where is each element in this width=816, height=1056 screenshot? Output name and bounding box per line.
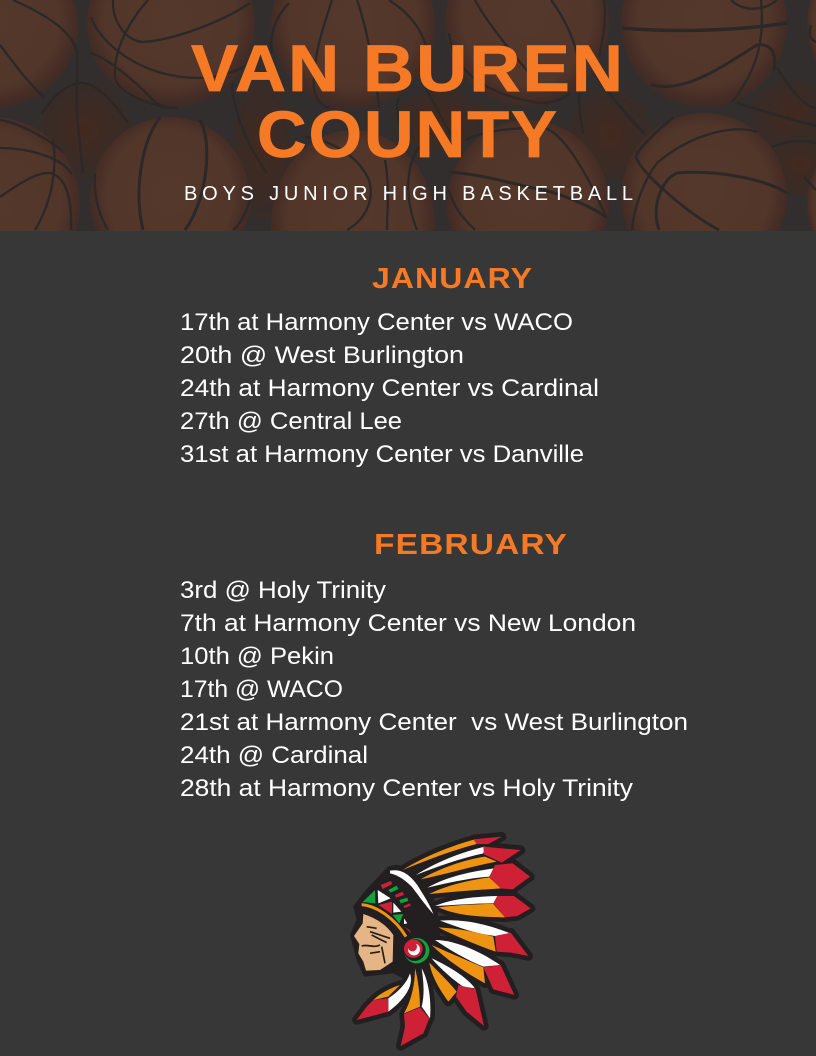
heading: January: JANUARY	[372, 263, 533, 295]
logo: chief with feather headdress	[352, 837, 531, 1046]
title: COUNTY	[257, 97, 559, 171]
heading: February: FEBRUARY	[374, 529, 568, 561]
header: basketball photo band	[0, 0, 816, 231]
title: VAN BUREN	[191, 31, 625, 105]
title	[191, 31, 625, 171]
January games	[180, 309, 599, 468]
February games: 3rd @ Holy Trinity	[180, 577, 386, 604]
February games: 21st at Harmony Center vs West Burlington	[180, 709, 688, 736]
feather outlines	[357, 837, 531, 1046]
February games: 17th @ WACO	[180, 676, 343, 703]
January games: 24th at Harmony Center vs Cardinal	[180, 375, 599, 402]
white plume	[390, 870, 433, 914]
February games: 24th @ Cardinal	[180, 742, 368, 769]
subtitle: BOYS JUNIOR HIGH BASKETBALL	[184, 183, 633, 205]
January games: 17th at Harmony Center vs WACO	[180, 309, 573, 336]
feathers	[357, 837, 531, 1046]
February games	[180, 577, 688, 802]
head silhouette	[352, 867, 439, 980]
January games: 31st at Harmony Center vs Danville	[180, 441, 584, 468]
headband beadwork	[363, 881, 411, 933]
January games: 27th @ Central Lee	[180, 408, 402, 435]
February games: 7th at Harmony Center vs New London	[180, 610, 636, 637]
face lines	[362, 927, 390, 963]
face	[354, 914, 393, 971]
ear ornament	[404, 938, 429, 963]
February games: 28th at Harmony Center vs Holy Trinity	[180, 775, 633, 802]
February games: 10th @ Pekin	[180, 643, 334, 670]
January games: 20th @ West Burlington	[180, 342, 464, 369]
headband	[362, 905, 406, 937]
